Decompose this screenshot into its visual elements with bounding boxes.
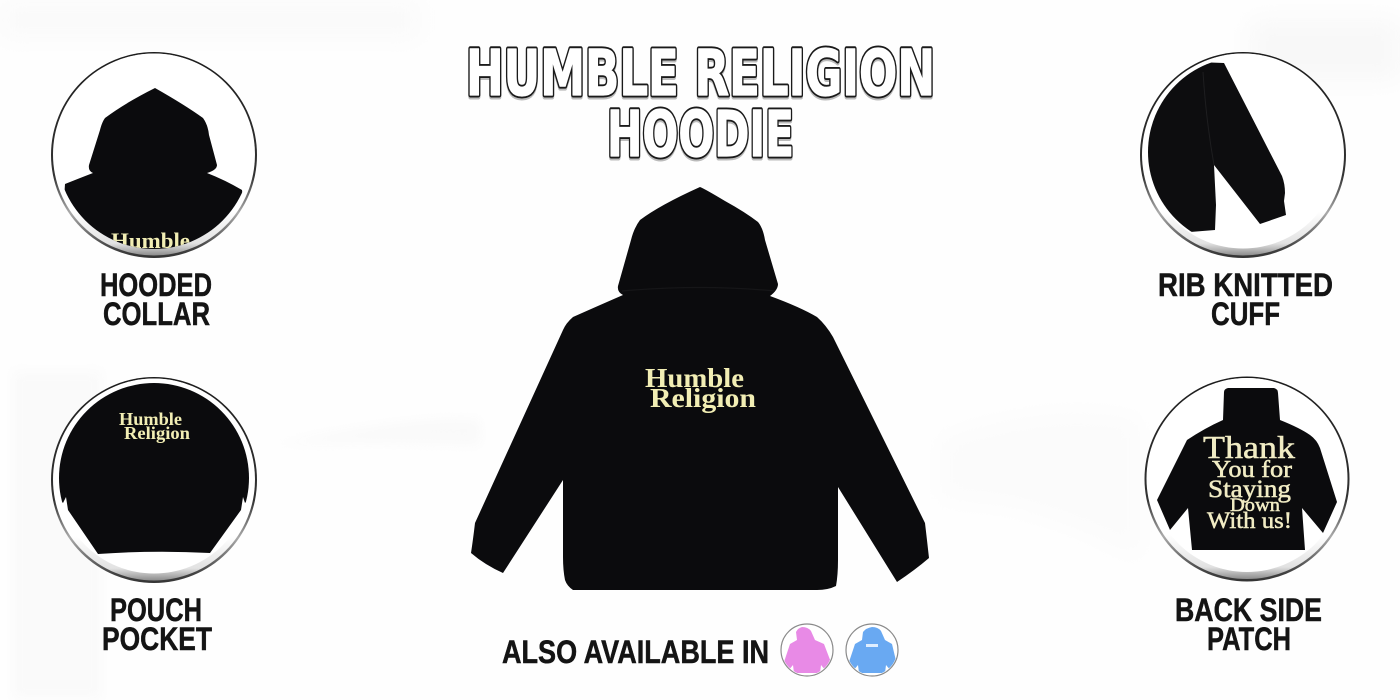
back print	[1203, 429, 1295, 533]
hood close-up: Humble	[111, 228, 190, 253]
label	[1175, 592, 1322, 657]
back print: Down	[1230, 495, 1281, 516]
feature: back side patch	[1144, 376, 1350, 657]
label: CUFF	[1211, 296, 1280, 332]
badge ring	[1144, 376, 1350, 582]
chest logo: Religion	[650, 383, 756, 413]
also available in	[502, 624, 898, 676]
label	[100, 267, 212, 332]
chest logo: Humble	[645, 363, 744, 393]
hood close-up	[64, 88, 242, 249]
sleeve close-up	[1140, 60, 1286, 232]
title: HUMBLE RELIGION	[466, 39, 935, 112]
main hoodie	[471, 187, 929, 590]
title: HUMBLE RELIGION	[466, 37, 935, 110]
badge ring	[51, 52, 257, 258]
hoodie body	[471, 187, 929, 590]
label	[1158, 267, 1333, 332]
feature: pouch pocket	[50, 375, 258, 657]
back of hoodie	[1157, 388, 1337, 550]
swatch: pink hoodie	[781, 624, 833, 676]
back print: You for	[1212, 457, 1292, 483]
badge ring	[51, 377, 257, 583]
label: COLLAR	[103, 296, 210, 332]
pocket close-up	[59, 383, 249, 554]
swatch: blue hoodie	[846, 624, 898, 676]
label: POCKET	[102, 621, 212, 657]
feature: rib knitted cuff	[1140, 52, 1346, 332]
title	[466, 37, 935, 173]
label: PATCH	[1207, 621, 1291, 657]
label: POUCH	[110, 592, 202, 628]
pocket close-up: Religion	[124, 423, 190, 443]
label: RIB KNITTED	[1158, 267, 1333, 303]
back print: Thank	[1203, 429, 1295, 465]
hood seam	[622, 288, 775, 291]
label: BACK SIDE	[1175, 592, 1322, 628]
chest logo	[645, 363, 756, 413]
title: HOODIE	[607, 98, 794, 171]
back print: With us!	[1207, 508, 1292, 533]
label	[102, 592, 212, 657]
title: HOODIE	[607, 100, 794, 173]
title: HUMBLE RELIGION	[466, 37, 935, 110]
title: HOODIE	[607, 98, 794, 171]
pocket close-up: Humble	[119, 409, 182, 429]
feature: hooded collar	[51, 52, 257, 332]
badge ring	[1140, 52, 1346, 258]
back print: Staying	[1208, 476, 1292, 503]
label: HOODED	[100, 267, 212, 303]
label: ALSO AVAILABLE IN	[502, 634, 769, 670]
